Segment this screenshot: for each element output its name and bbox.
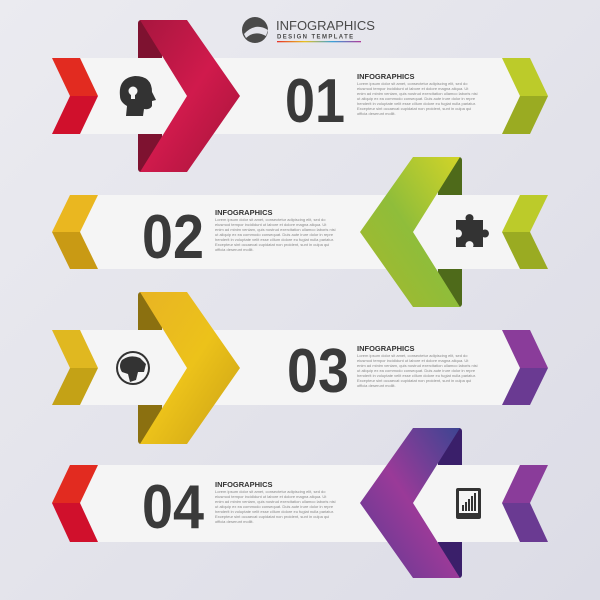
text block 2: officia deserunt mollit. bbox=[215, 247, 254, 252]
logo bbox=[242, 17, 375, 43]
text block 4: INFOGRAPHICS bbox=[215, 480, 273, 489]
text block 2 bbox=[215, 208, 336, 252]
icon: head with bulb bbox=[120, 76, 156, 116]
number 03: 03 bbox=[287, 337, 349, 406]
text block 1: Lorem ipsum dolor sit amet, consectetur adipiscing elit, sed do bbox=[357, 81, 468, 86]
text block 4: Lorem ipsum dolor sit amet, consectetur adipiscing elit, sed do bbox=[215, 489, 326, 494]
chevron: yellow left bbox=[52, 195, 98, 269]
logo: INFOGRAPHICS bbox=[276, 18, 375, 33]
text block 1: enim ad minim veniam, quis nostrud exercitation ullamco laboris nisi bbox=[357, 91, 478, 96]
chevron: purple right bbox=[502, 465, 548, 542]
text block 4: henderit in voluptate velit esse cillum dolore eu fugiat nulla pariatur. bbox=[215, 509, 334, 514]
text block 1: eiusmod tempor incididunt ut labore et dolore magna aliqua. Ut bbox=[357, 86, 469, 91]
text block 4: enim ad minim veniam, quis nostrud exercitation ullamco laboris nisi bbox=[215, 499, 336, 504]
chevron: green right bbox=[502, 58, 548, 134]
text block 2: enim ad minim veniam, quis nostrud exercitation ullamco laboris nisi bbox=[215, 227, 336, 232]
big purple chevron bbox=[360, 428, 460, 578]
text block 3: Excepteur sint occaecat cupidatat non proident, sunt in culpa qui bbox=[357, 378, 471, 383]
text block 1: officia deserunt mollit. bbox=[357, 111, 396, 116]
row 3 bbox=[52, 292, 548, 444]
text block 1 bbox=[357, 72, 478, 116]
text block 4: eiusmod tempor incididunt ut labore et dolore magna aliqua. Ut bbox=[215, 494, 327, 499]
text block 3: INFOGRAPHICS bbox=[357, 344, 415, 353]
chevron: yellow left bbox=[52, 330, 98, 405]
text block 3: eiusmod tempor incididunt ut labore et dolore magna aliqua. Ut bbox=[357, 358, 469, 363]
icon: globe bbox=[116, 351, 150, 385]
big green chevron bbox=[360, 157, 460, 307]
text block 2: Lorem ipsum dolor sit amet, consectetur adipiscing elit, sed do bbox=[215, 217, 326, 222]
chevron: green right small bbox=[502, 195, 548, 269]
text block 3: ut aliquip ex ea commodo consequat. Duis aute irure dolor in repre bbox=[357, 368, 476, 373]
text block 3: officia deserunt mollit. bbox=[357, 383, 396, 388]
text block 4: ut aliquip ex ea commodo consequat. Duis aute irure dolor in repre bbox=[215, 504, 334, 509]
text block 2: henderit in voluptate velit esse cillum dolore eu fugiat nulla pariatur. bbox=[215, 237, 334, 242]
row 2 bbox=[52, 157, 548, 307]
text block 2: ut aliquip ex ea commodo consequat. Duis aute irure dolor in repre bbox=[215, 232, 334, 237]
text block 2: INFOGRAPHICS bbox=[215, 208, 273, 217]
text block 4: officia deserunt mollit. bbox=[215, 519, 254, 524]
text block 3: enim ad minim veniam, quis nostrud exercitation ullamco laboris nisi bbox=[357, 363, 478, 368]
chevron: purple right bbox=[502, 330, 548, 405]
text block 3: henderit in voluptate velit esse cillum dolore eu fugiat nulla pariatur. bbox=[357, 373, 476, 378]
text block 1: henderit in voluptate velit esse cillum dolore eu fugiat nulla pariatur. bbox=[357, 101, 476, 106]
text block 1: ut aliquip ex ea commodo consequat. Duis aute irure dolor in repre bbox=[357, 96, 476, 101]
number 02: 02 bbox=[142, 203, 204, 272]
icon: tablet chart bbox=[456, 488, 481, 519]
text block 2: Excepteur sint occaecat cupidatat non proident, sunt in culpa qui bbox=[215, 242, 329, 247]
text block 1: Excepteur sint occaecat cupidatat non proident, sunt in culpa qui bbox=[357, 106, 471, 111]
text block 3 bbox=[357, 344, 478, 388]
row 1 bbox=[52, 20, 548, 172]
text block 1: INFOGRAPHICS bbox=[357, 72, 415, 81]
text block 4 bbox=[215, 480, 336, 524]
text block 4: Excepteur sint occaecat cupidatat non proident, sunt in culpa qui bbox=[215, 514, 329, 519]
number 01: 01 bbox=[285, 67, 345, 136]
logo: DESIGN TEMPLATE bbox=[277, 34, 355, 40]
big red chevron bbox=[140, 20, 240, 172]
number 04: 04 bbox=[142, 473, 204, 542]
text block 3: Lorem ipsum dolor sit amet, consectetur adipiscing elit, sed do bbox=[357, 353, 468, 358]
big yellow chevron bbox=[140, 292, 240, 444]
icon: puzzle bbox=[456, 214, 489, 247]
row 4 bbox=[52, 428, 548, 578]
text block 2: eiusmod tempor incididunt ut labore et dolore magna aliqua. Ut bbox=[215, 222, 327, 227]
chevron: red left bbox=[52, 58, 98, 134]
chevron: red left bbox=[52, 465, 98, 542]
